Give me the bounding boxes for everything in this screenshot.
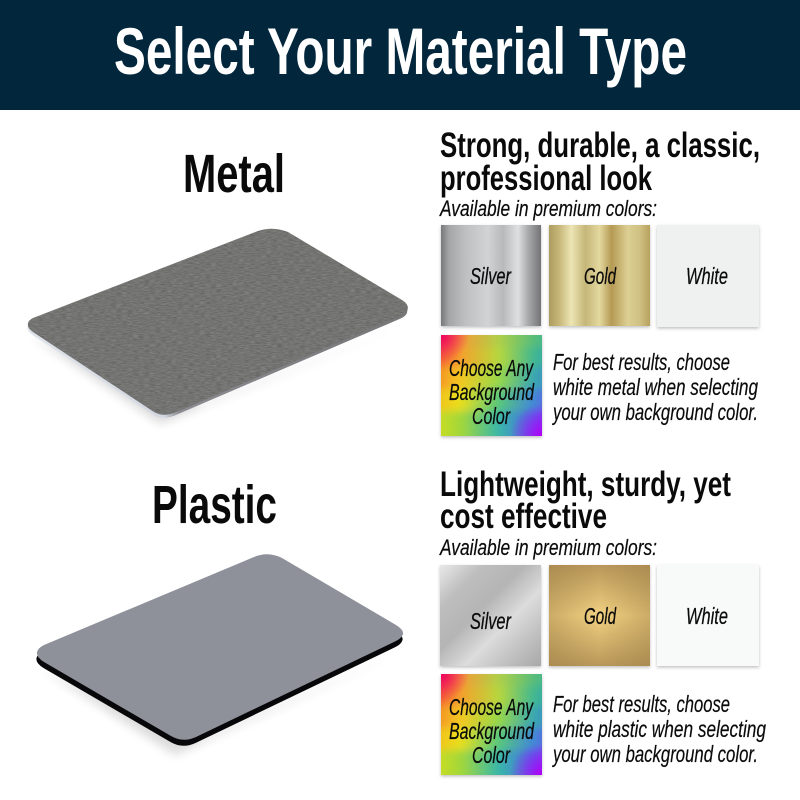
swatch: choose any background color: Color <box>472 742 511 768</box>
swatch: gold <box>549 565 650 666</box>
swatch: choose any background color <box>439 674 544 778</box>
swatch: choose any background color <box>439 334 544 440</box>
swatch: choose any background color: Background <box>449 718 535 744</box>
swatch: white: White <box>686 263 728 289</box>
header banner <box>0 0 800 110</box>
swatch: white <box>657 565 759 666</box>
panel: plastic <box>36 465 766 800</box>
text: available colors: Available in premium colors: <box>438 535 657 560</box>
subheading: metal benefits: professional look <box>440 159 652 198</box>
swatch: silver <box>441 225 541 326</box>
swatch: white: White <box>686 603 728 629</box>
panel: metal <box>27 126 760 468</box>
swatch: silver: Silver <box>470 608 512 634</box>
swatch: choose any background color: Choose Any <box>449 694 534 720</box>
swatch: gold: Gold <box>584 603 617 629</box>
note: plastic best results: For best results, choose <box>553 691 730 717</box>
note: metal best results: For best results, choose <box>553 349 730 375</box>
swatch: choose any background color: Color <box>472 403 511 429</box>
subheading: plastic benefits <box>440 465 731 536</box>
heading: Metal: Metal <box>183 144 285 204</box>
swatch: choose any background color: Background <box>449 379 535 405</box>
swatch: silver: Silver <box>470 263 512 289</box>
image: metal plate <box>27 229 408 424</box>
note: plastic best results <box>552 691 766 767</box>
swatch: gold <box>549 225 650 326</box>
note: metal best results <box>552 349 758 425</box>
swatch: white <box>657 225 759 327</box>
text: available colors: Available in premium colors: <box>438 196 657 221</box>
swatch: gold: Gold <box>584 263 617 289</box>
subheading: plastic benefits: cost effective <box>440 497 607 536</box>
subheading: metal benefits <box>440 126 760 198</box>
image: plastic plate <box>36 554 403 755</box>
heading: Plastic: Plastic <box>152 475 277 535</box>
swatch: silver <box>440 565 541 666</box>
swatch: choose any background color: Choose Any <box>449 355 534 381</box>
